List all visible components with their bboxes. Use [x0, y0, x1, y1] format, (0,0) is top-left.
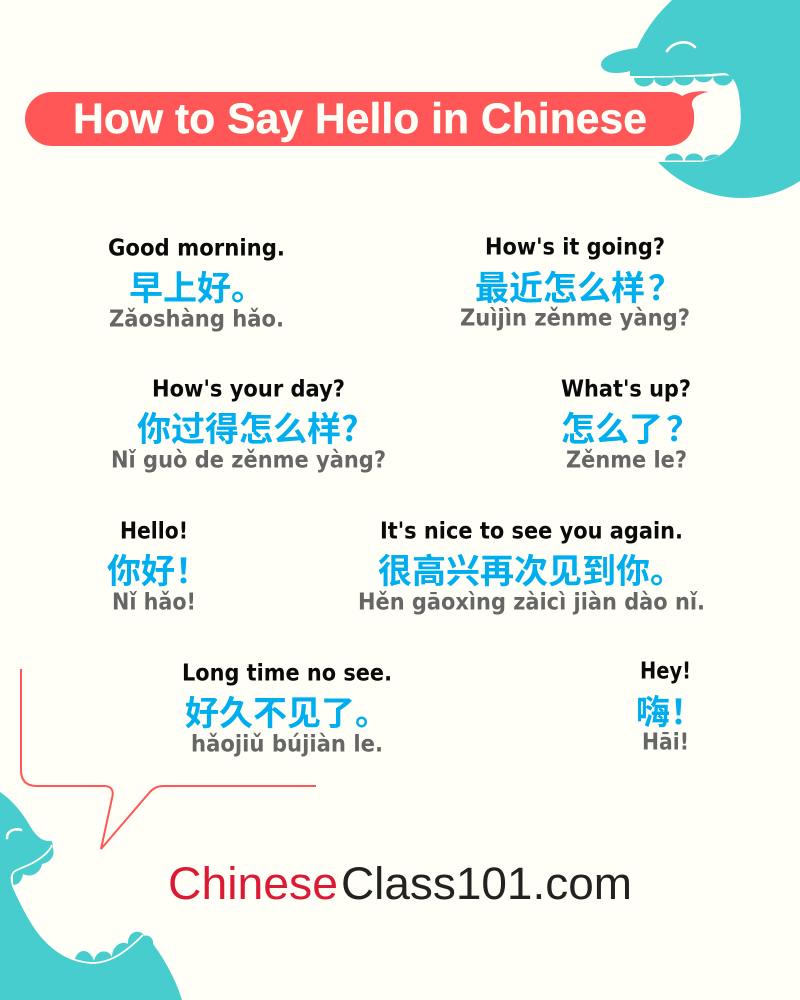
phrase: long time no see: Long time no see.	[182, 658, 392, 686]
eye	[667, 42, 695, 51]
phrase: how's your day	[111, 374, 386, 474]
phrase: how's it going: 最近怎么样？	[475, 261, 682, 310]
logo: Class101.com	[341, 858, 632, 909]
phrase: how's it going	[460, 232, 690, 332]
phrase: hey: 嗨！	[636, 685, 704, 734]
upper teeth	[13, 846, 54, 885]
phrase: hello	[107, 516, 209, 616]
phrase: hello: Nǐ hǎo!	[112, 588, 196, 616]
teeth: upper	[634, 75, 733, 86]
teeth: lower	[665, 154, 719, 160]
phrase: hello: 你好！	[107, 544, 209, 593]
phrase: good morning: Good morning.	[108, 234, 285, 262]
speech bubble outline	[21, 669, 316, 849]
phrase: how's it going: Zuìjìn zěnme yàng?	[460, 304, 690, 332]
mouth lining	[630, 73, 741, 162]
phrase: good morning	[108, 234, 285, 332]
phrase: nice to see you again: Hěn gāoxìng zàicì jiàn dào nǐ.	[358, 588, 705, 616]
phrase: what's up: What's up?	[561, 374, 691, 402]
phrase: long time no see	[182, 658, 392, 758]
mouth lines	[12, 845, 143, 963]
phrase: how's your day: How's your day?	[152, 374, 345, 402]
phrase: good morning: Zǎoshàng hǎo.	[109, 304, 284, 332]
phrase: long time no see: hǎojiǔ bújiàn le.	[191, 730, 383, 758]
eye	[7, 829, 21, 838]
banner pill with tongue	[25, 91, 708, 146]
title text: How to Say Hello in Chinese	[73, 95, 647, 143]
phrase: what's up: 怎么了？	[561, 402, 700, 451]
logo: Chinese	[168, 858, 338, 909]
phrase: long time no see: 好久不见了。	[185, 686, 389, 735]
icon: bottom-left whale	[0, 792, 182, 1000]
phrase: hey	[636, 656, 704, 756]
phrase: nice to see you again	[358, 516, 705, 616]
phrase: nice to see you again: 很高兴再次见到你。	[378, 544, 684, 593]
phrase: nice to see you again: It's nice to see you again.	[380, 516, 683, 544]
lower teeth	[75, 932, 144, 965]
phrase: what's up: Zěnme le?	[566, 446, 687, 474]
phrase: how's your day: 你过得怎么样?	[137, 402, 358, 451]
phrase: what's up	[561, 374, 700, 474]
title banner	[25, 91, 708, 146]
phrase: good morning: 早上好。	[129, 261, 265, 310]
phrase: how's your day: Nǐ guò de zěnme yàng?	[111, 446, 386, 474]
phrase: how's it going: How's it going?	[485, 232, 665, 260]
logo	[168, 858, 632, 909]
phrase: hey: Hey!	[640, 656, 691, 684]
icon: top-right whale	[601, 0, 800, 198]
phrase: hey: Hāi!	[642, 728, 689, 756]
phrase: hello: Hello!	[120, 516, 188, 544]
